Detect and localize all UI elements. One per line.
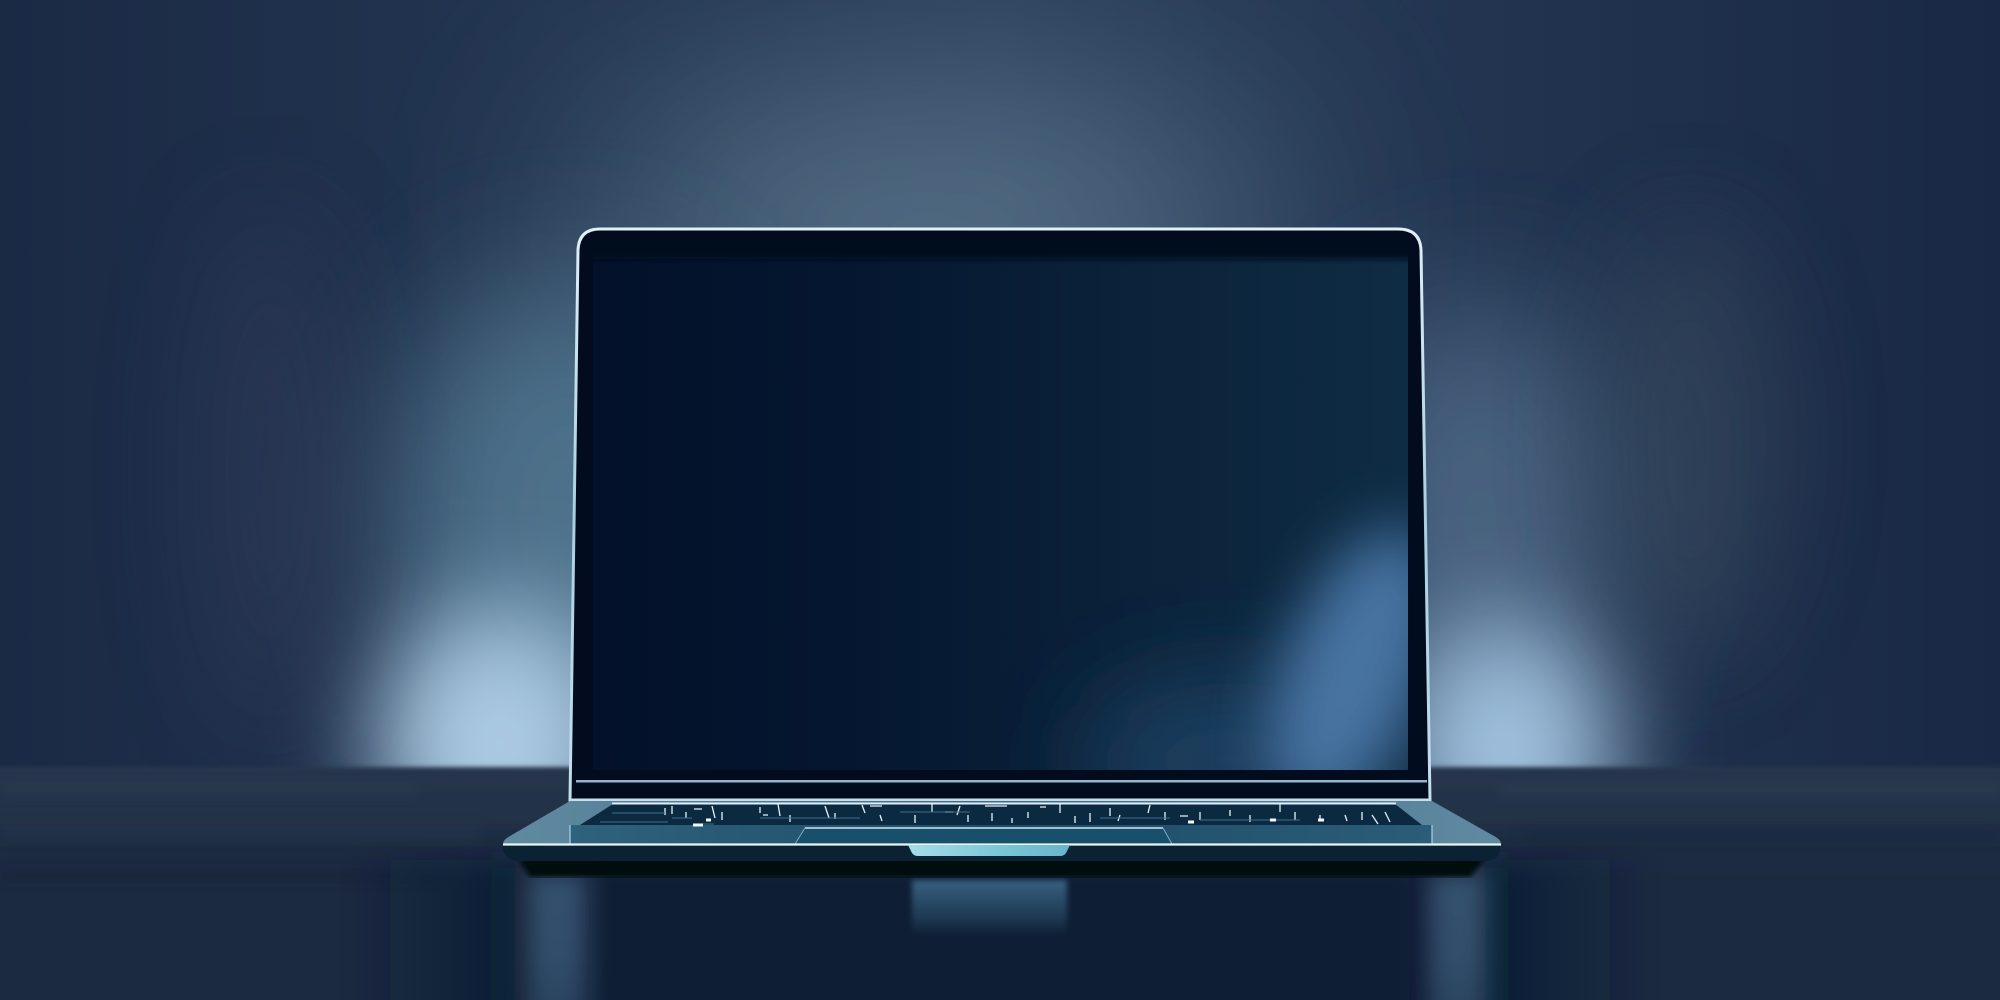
front edge	[503, 845, 1500, 861]
screen lower-right haze	[1062, 646, 1295, 770]
left lower light pool	[305, 548, 572, 770]
right grey band	[1641, 254, 1779, 614]
left haze	[334, 230, 584, 710]
right lower light pool	[1395, 620, 1615, 880]
reflection: left lid edge	[528, 872, 588, 1000]
right haze	[1423, 256, 1654, 704]
laptop lid	[568, 228, 1432, 802]
laptop	[503, 225, 1501, 877]
left violet band	[248, 366, 292, 574]
keyboard well	[580, 803, 1422, 825]
reflection: right lid edge	[1428, 872, 1486, 1000]
reflection: front notch	[912, 880, 1067, 935]
background wall with soft glow	[196, 0, 1806, 770]
hinge highlight line	[576, 780, 1427, 782]
base edge lines	[570, 825, 1432, 844]
opening notch	[908, 845, 1070, 856]
table surface	[0, 767, 2000, 1000]
front shadow	[518, 858, 1486, 877]
screen top bezel shadow	[593, 240, 1408, 262]
laptop screen	[593, 256, 1408, 770]
top centre glow	[590, 100, 1270, 360]
front white highlight	[503, 843, 1501, 846]
laptop base	[503, 801, 1501, 877]
trackpad	[795, 828, 1172, 844]
palm rest	[570, 825, 1432, 844]
dark centre of table	[340, 860, 1660, 1000]
base deck	[503, 801, 1501, 845]
screen light patch	[1236, 497, 1408, 770]
key highlight marks	[665, 803, 1390, 824]
horizontal table streaks	[0, 785, 2000, 882]
